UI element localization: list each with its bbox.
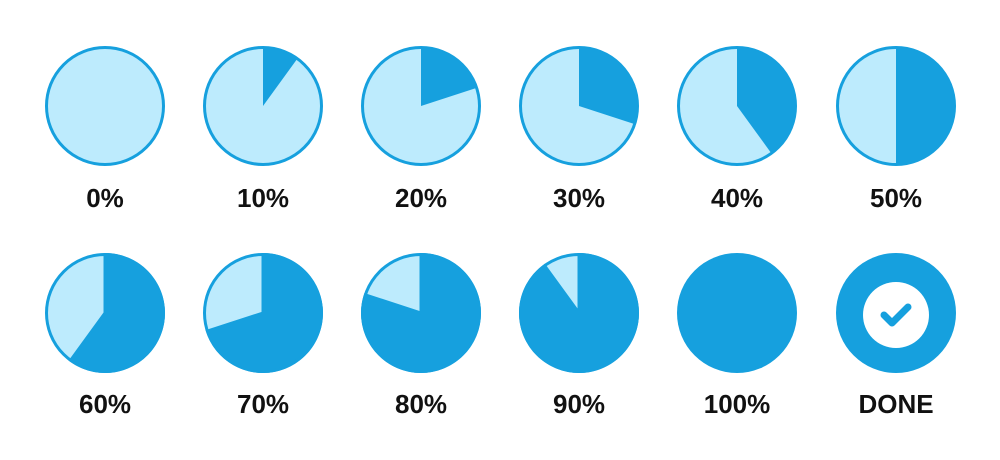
pie: 100% [677, 253, 797, 419]
pie: 40%: 40% [711, 183, 763, 213]
pie: 10% [204, 47, 322, 213]
pie: 40% [678, 48, 796, 213]
icon: done checkmark: DONE [858, 389, 934, 419]
pie: 100%: 100% [704, 389, 770, 419]
pie: 30% [520, 47, 638, 213]
pie: 90%: 90% [553, 389, 605, 419]
pie: 30%: 30% [553, 183, 605, 213]
pie: 60% [46, 254, 164, 419]
pie: 10%: 10% [237, 183, 289, 213]
pie: 20%: 20% [395, 183, 447, 213]
pie: 0%: 0% [86, 183, 124, 213]
pie: 80%: 80% [395, 389, 447, 419]
pie: 70% [204, 254, 322, 419]
pie: 0% [46, 48, 164, 213]
pie: 90% [520, 254, 638, 419]
pie: 70%: 70% [237, 389, 289, 419]
pie: 50%: 50% [870, 183, 922, 213]
pie: 20% [362, 48, 480, 213]
pie: 80% [362, 254, 480, 419]
icon: done checkmark [836, 253, 956, 419]
pie: 50% [838, 48, 954, 213]
pie: 60%: 60% [79, 389, 131, 419]
